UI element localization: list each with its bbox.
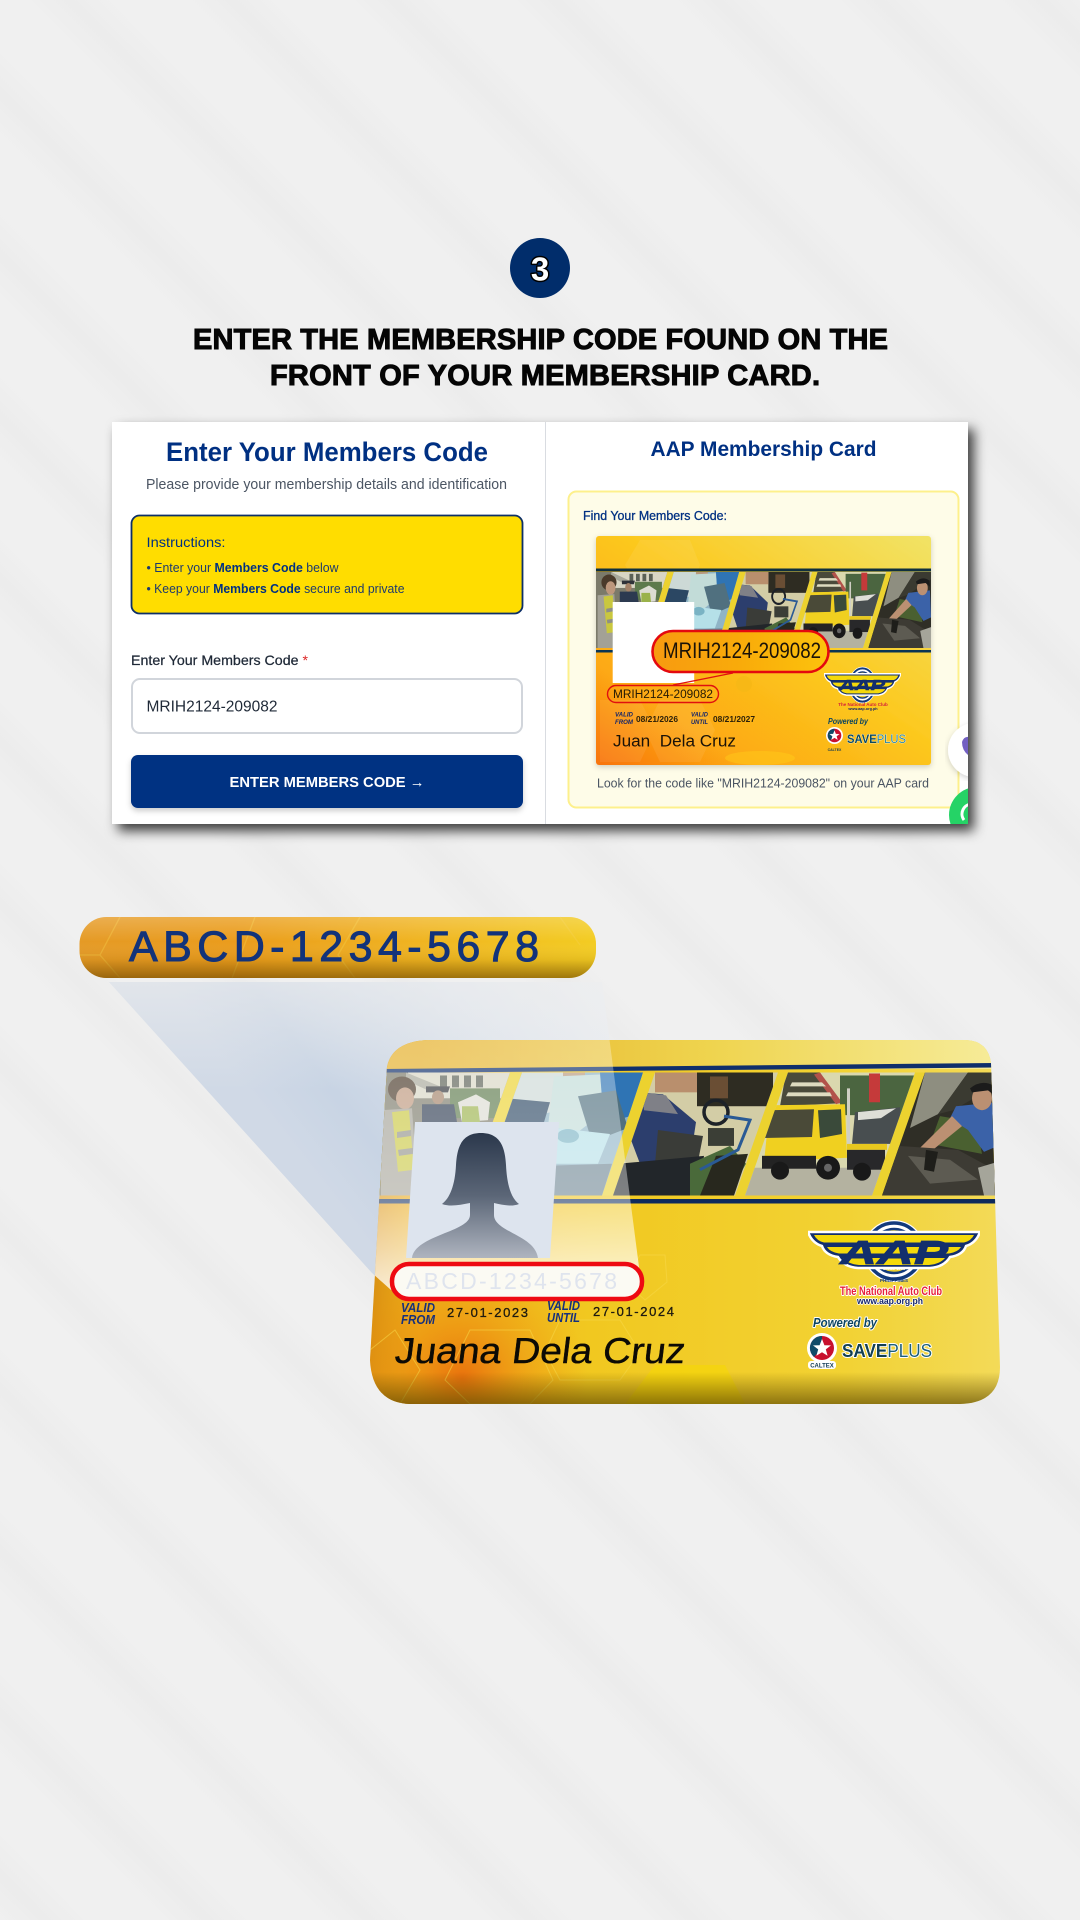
AAP logo: www.aap.org.ph — [856, 1296, 923, 1306]
AAP logo: SINCE 1931 — [883, 1266, 906, 1271]
sponsor logos: SAVEPLUS — [847, 732, 906, 746]
callout line — [673, 673, 733, 685]
AAP logo — [824, 667, 901, 711]
small code pill — [608, 686, 718, 702]
cardholder name: Juan Dela Cruz — [613, 732, 736, 750]
input label: Enter Your Members Code * — [131, 652, 309, 668]
validity dates: VALID — [691, 712, 708, 718]
sponsor logos: CALTEX — [810, 1364, 834, 1370]
instructions box: • Keep your Members Code secure and private — [146, 582, 405, 596]
cardholder name: Juana Dela Cruz — [393, 1330, 688, 1371]
instructions box: • Enter your Members Code below — [146, 561, 339, 575]
code input field — [132, 679, 522, 733]
code input field: MRIH2124-209082 — [146, 698, 278, 716]
card heading: AAP Membership Card — [650, 438, 876, 461]
silhouette — [412, 1133, 538, 1258]
AAP logo: AAP — [838, 677, 886, 694]
validity dates — [615, 712, 756, 726]
title: FRONT OF YOUR MEMBERSHIP CARD. — [270, 360, 820, 392]
sponsor logos: CALTEX — [828, 748, 842, 752]
sponsor logos: Powered by — [813, 1315, 878, 1330]
enlarged membership card — [370, 1040, 1000, 1404]
AAP logo: The National Auto Club — [838, 702, 888, 707]
sponsor logos — [807, 1315, 932, 1370]
instructions box: Instructions: — [146, 534, 226, 550]
validity dates: UNTIL — [547, 1310, 580, 1325]
title: ENTER THE MEMBERSHIP CODE FOUND ON THE — [193, 324, 888, 356]
form column — [131, 437, 523, 808]
validity dates: VALID — [615, 712, 633, 718]
card column — [568, 438, 958, 808]
sponsor logos: Powered by — [828, 717, 868, 726]
step number badge — [510, 238, 570, 298]
validity dates: VALID — [401, 1300, 436, 1315]
form subtitle: Please provide your membership details and identification — [146, 477, 507, 493]
title — [193, 324, 888, 392]
ID photo placeholder — [406, 1122, 559, 1258]
validity dates: 27-01-2024 — [593, 1304, 674, 1319]
sponsor logos — [826, 717, 906, 752]
validity dates: UNTIL — [691, 719, 708, 726]
validity dates: 08/21/2027 — [713, 715, 756, 724]
highlighted code pill — [392, 1264, 642, 1299]
validity dates: VALID — [547, 1298, 581, 1313]
form heading: Enter Your Members Code — [166, 437, 488, 467]
highlighted code pill: ABCD-1234-5678 — [406, 1268, 617, 1294]
light beam from code strip to card — [109, 982, 642, 1290]
AAP logo: AAP — [838, 1234, 950, 1271]
sponsor logos: SAVEPLUS — [842, 1340, 932, 1361]
magnified code pill — [652, 631, 828, 672]
card help box — [568, 492, 958, 808]
instructions box — [132, 516, 522, 614]
enlarged code strip — [80, 917, 596, 978]
validity dates — [401, 1298, 674, 1327]
validity dates: FROM — [401, 1312, 436, 1327]
floating chat buttons — [946, 724, 968, 824]
validity dates: 27-01-2023 — [447, 1305, 528, 1320]
step number badge: 3 — [531, 250, 549, 288]
infographic canvas — [80, 238, 1000, 1404]
AAP logo — [808, 1220, 980, 1306]
AAP logo: www.aap.org.ph — [847, 707, 878, 711]
enlarged code strip: ABCD-1234-5678 — [129, 923, 539, 971]
card help label: Find Your Members Code: — [583, 508, 727, 523]
magnified code pill: MRIH2124-209082 — [663, 638, 821, 663]
submit button — [131, 755, 523, 808]
beam overlay on card — [375, 1040, 640, 1290]
small code pill: MRIH2124-209082 — [613, 689, 713, 701]
validity dates: 08/21/2026 — [636, 715, 679, 724]
panel: website screenshot — [112, 422, 1005, 843]
validity dates: FROM — [615, 719, 634, 726]
small membership card — [596, 536, 934, 765]
AAP logo: The National Auto Club — [840, 1286, 942, 1298]
AAP logo: PHILIPPINES — [880, 1278, 908, 1283]
card help caption: Look for the code like "MRIH2124-209082" on your AAP card — [597, 776, 929, 790]
submit button: ENTER MEMBERS CODE → — [230, 774, 424, 791]
